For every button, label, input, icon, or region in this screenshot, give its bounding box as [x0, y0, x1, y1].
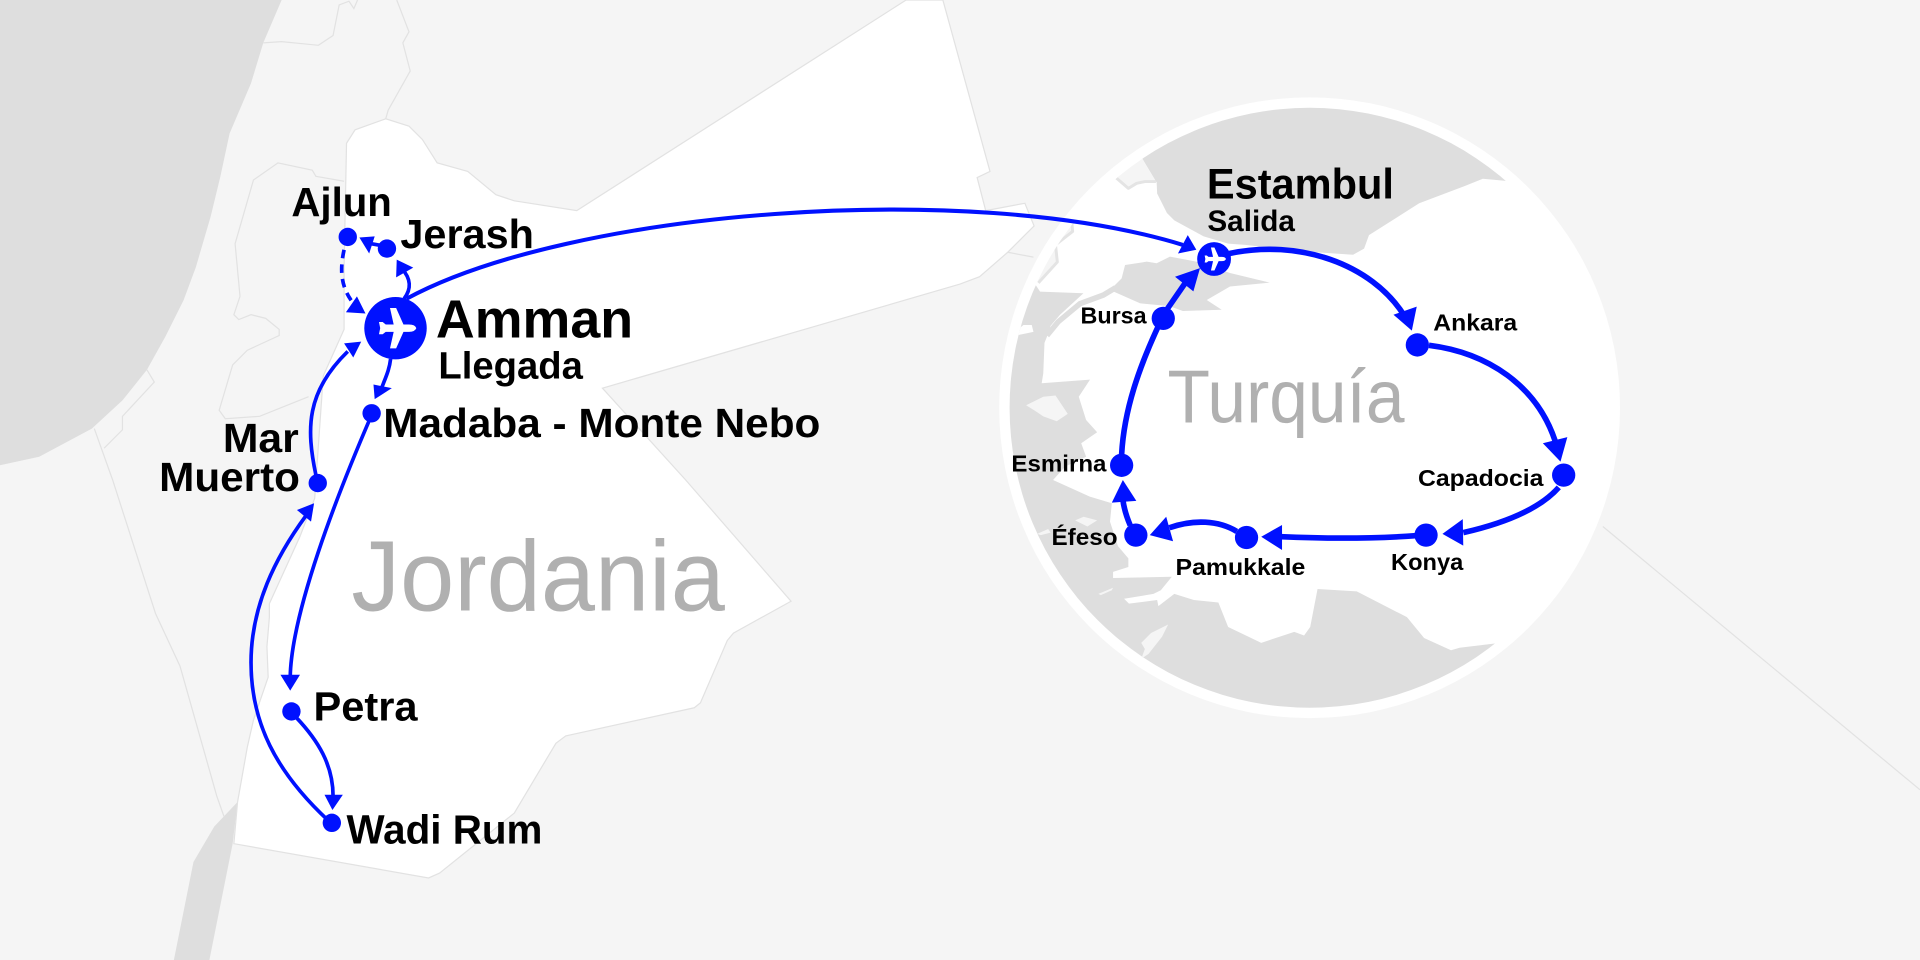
route: Wadi Rum to Mar Muerto [251, 503, 328, 820]
stop: Bursa [1152, 307, 1175, 330]
label: Ajlun: Ajlun [291, 179, 392, 225]
land: Greece [1038, 227, 1071, 280]
route: Ankara to Capadocia [1429, 345, 1567, 462]
route: Pamukkale to Éfeso [1150, 517, 1237, 541]
label: Jordania: Jordania [351, 521, 725, 633]
route: Esmirna to Bursa [1122, 321, 1161, 454]
route: Amman to Jerash [396, 260, 413, 299]
border: Greece [1038, 218, 1073, 283]
stop: Wadi Rum [323, 814, 341, 832]
label: Mar Muerto: Muerto [159, 454, 300, 500]
route: Éfeso to Esmirna [1112, 480, 1136, 525]
route: Jerash to Ajlun [359, 236, 384, 253]
stops: Turkey [1110, 242, 1575, 549]
stop: Capadocia [1552, 463, 1575, 487]
route: Ajlun to Amman (dashed) [342, 250, 366, 313]
routes: Jordan [251, 210, 1196, 820]
stop: Jerash [378, 239, 396, 258]
label: Wadi Rum: Wadi Rum [347, 807, 542, 853]
label: Éfeso: Éfeso [1051, 523, 1118, 550]
label: Petra: Petra [313, 684, 418, 730]
label: Mar Muerto [159, 415, 300, 500]
label: Salida: Salida [1207, 205, 1296, 238]
sea: Black Sea [1142, 108, 1506, 255]
sea: Mediterranean [0, 0, 282, 465]
country names [351, 354, 1405, 633]
label: Jerash: Jerash [400, 211, 534, 257]
stop: Amman with plane icon [364, 297, 427, 359]
route: Mar Muerto to Amman [311, 342, 361, 475]
stop: Madaba [362, 404, 381, 422]
place labels: Jordan [159, 179, 820, 853]
label: Esmirna: Esmirna [1011, 450, 1108, 476]
label: Amman: Amman [436, 290, 633, 350]
label: Ankara: Ankara [1433, 310, 1518, 336]
strait: Dardanelles [1047, 288, 1116, 336]
country: Jordan [234, 0, 1034, 878]
route: Amman to Madaba [373, 359, 392, 399]
label: Estambul: Estambul [1207, 160, 1394, 208]
route: Petra to Wadi Rum [296, 718, 343, 810]
route: Bursa to Estambul [1168, 268, 1200, 309]
border: Bulgaria [1114, 176, 1156, 188]
sea: Gulf of Aqaba [174, 802, 238, 960]
place labels: Turkey [1011, 160, 1545, 580]
label: Pamukkale: Pamukkale [1176, 554, 1305, 580]
stop: Petra [282, 702, 301, 721]
stop: Esmirna [1110, 454, 1133, 477]
land: Bulgaria [1118, 159, 1154, 186]
stop: Konya [1414, 523, 1438, 547]
label: Capadocia: Capadocia [1418, 465, 1545, 491]
route: Konya to Pamukkale [1261, 525, 1416, 550]
stop: Estambul with plane icon [1197, 242, 1231, 276]
stop: Pamukkale [1235, 526, 1258, 549]
sea: Aegean and Mediterranean [1010, 286, 1495, 708]
label: Madaba - Monte Nebo: Madaba - Monte Nebo [383, 400, 820, 446]
routes: Turkey [1112, 249, 1567, 550]
label: Turquía: Turquía [1168, 354, 1405, 438]
route: Capadocia to Konya [1442, 487, 1559, 546]
route: Amman to Estambul [407, 210, 1196, 299]
inset geography [1010, 108, 1506, 708]
sea: Marmara [1110, 257, 1270, 311]
label: Llegada: Llegada [438, 345, 584, 387]
stops: Jordan [282, 228, 427, 832]
inset circle: Turkey [980, 86, 1620, 735]
label: Mar Muerto: Mar [223, 415, 299, 461]
label: Bursa: Bursa [1080, 302, 1148, 328]
islands [1015, 325, 1168, 659]
route: Madaba to Petra [280, 416, 371, 691]
route: Estambul to Ankara [1229, 249, 1417, 331]
stop: Mar Muerto [309, 474, 327, 492]
stop: Éfeso [1124, 523, 1147, 547]
stop: Ajlun [339, 228, 357, 246]
label: Konya: Konya [1391, 549, 1464, 575]
stop: Ankara [1406, 333, 1429, 357]
